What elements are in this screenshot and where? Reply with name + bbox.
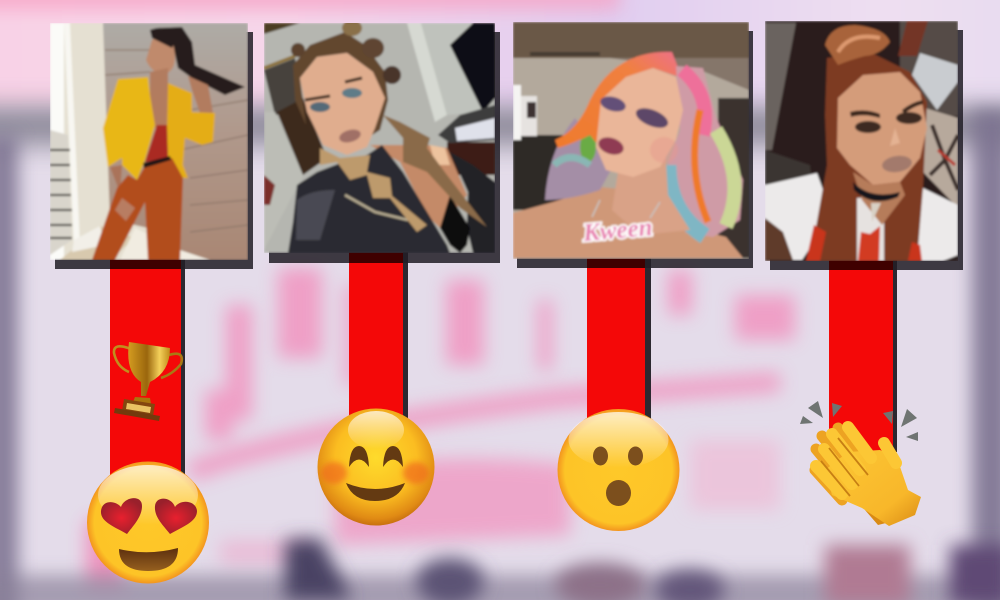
photo 1: woman in yellow jacket [50, 23, 253, 269]
photo 3: woman with rainbow hair [513, 22, 753, 268]
bar 1 with shadow [110, 258, 185, 476]
bar 2 with shadow [349, 252, 408, 424]
bar 3 with shadow [587, 258, 651, 426]
icon: surprised emoji [558, 409, 680, 531]
photo 2: woman with braids [264, 20, 500, 263]
necklace lettering: Kween [581, 214, 654, 247]
bar 4 with shadow [829, 260, 897, 452]
icon: trophy [114, 342, 182, 421]
icon: smiling emoji [318, 408, 434, 526]
icon: clapping hands [800, 401, 921, 526]
photo 4: woman with top knot [765, 21, 963, 270]
icon: heart-eyes emoji [87, 462, 209, 584]
